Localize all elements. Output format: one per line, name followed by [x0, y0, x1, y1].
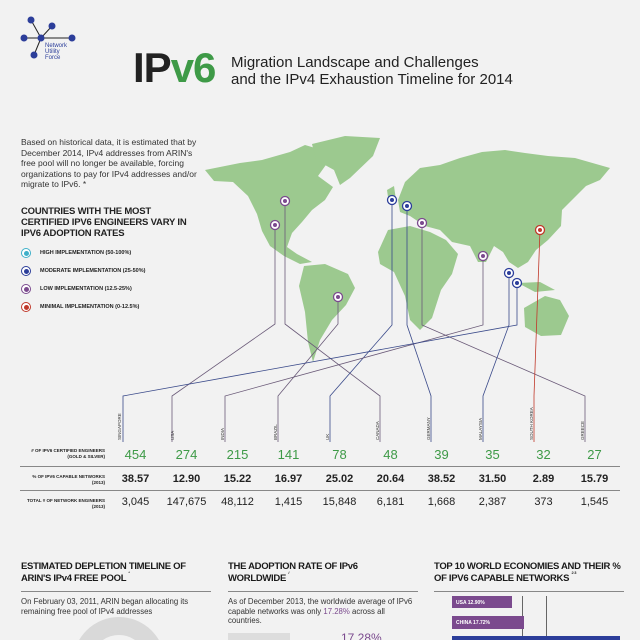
data table: 16.97 — [275, 473, 302, 485]
data table — [20, 447, 620, 509]
panel: top 10 economies: TOP 10 WORLD ECONOMIES AND THEIR % — [434, 561, 621, 572]
panel: adoption rate: WORLDWIDE / — [228, 570, 289, 584]
world map with pins: UK — [325, 434, 330, 440]
panel: top 10 economies — [434, 561, 624, 640]
data table: 454 — [125, 447, 146, 462]
legend: HIGH IMPLEMENTATION (50-100%) — [40, 250, 131, 256]
data table: 141 — [278, 447, 299, 462]
world map with pins: BRAZIL — [273, 424, 278, 440]
panel: adoption rate: THE ADOPTION RATE OF IPv6 — [228, 561, 358, 572]
data table: 20.64 — [377, 473, 404, 485]
data table: 274 — [176, 447, 197, 462]
data table: 3,045 — [122, 496, 149, 508]
subtitle: and the IPv4 Exhaustion Timeline for 2014 — [231, 71, 513, 88]
data table: 38.52 — [428, 473, 455, 485]
data table: 147,675 — [167, 496, 206, 508]
world map with pins: SOUTH KOREA — [529, 407, 534, 440]
world map with pins: SINGAPORE — [117, 413, 122, 440]
data table: % OF IPV6 CAPABLE NETWORKS (2013) — [32, 474, 105, 485]
panel: depletion timeline: ARIN'S IPv4 FREE POOL * — [21, 570, 130, 584]
data table: 25.02 — [326, 473, 353, 485]
data table: 2,387 — [479, 496, 506, 508]
panel: depletion timeline — [21, 561, 211, 640]
data table: 31.50 — [479, 473, 506, 485]
data table: 35 — [485, 447, 500, 462]
data table: 48,112 — [221, 496, 254, 508]
data table: 38.57 — [122, 473, 149, 485]
world map with pins — [117, 136, 610, 442]
data table: 27 — [587, 447, 602, 462]
panel: depletion timeline: On February 03, 2011, ARIN began allocating its remaining free pool of IPv4 addresses — [21, 597, 188, 616]
data table: 78 — [332, 447, 347, 462]
logo: Utility — [45, 49, 60, 55]
logo: Network — [45, 43, 68, 49]
data table: 32 — [536, 447, 551, 462]
data table: 15.79 — [581, 473, 608, 485]
panel: top 10 economies: CHINA 17.72% — [456, 620, 490, 626]
data table: 39 — [434, 447, 449, 462]
donut chart — [73, 617, 165, 640]
world map with pins: MALAYSIA — [478, 418, 483, 440]
world map with pins: USA — [170, 431, 175, 440]
heading: countries: COUNTRIES WITH THE MOST — [21, 206, 151, 217]
panel: depletion timeline: ESTIMATED DEPLETION TIMELINE OF — [21, 561, 186, 572]
heading: countries: IPV6 ADOPTION RATES — [21, 228, 124, 239]
world map with pins: INDIA — [220, 428, 225, 440]
data table: 2.89 — [533, 473, 554, 485]
world map with pins: GERMANY — [426, 417, 431, 440]
data table: 12.90 — [173, 473, 200, 485]
logo: Force — [45, 55, 61, 61]
legend: MINIMAL IMPLEMENTATION (0-12.5%) — [40, 304, 139, 310]
data table: 1,545 — [581, 496, 608, 508]
data table: 48 — [383, 447, 398, 462]
data table: TOTAL # OF NETWORK ENGINEERS (2013) — [27, 498, 105, 509]
title: IPv6 — [133, 44, 215, 91]
legend: MODERATE IMPLEMENTATION (25-50%) — [40, 268, 145, 274]
panel: adoption rate — [228, 561, 418, 640]
panel: adoption rate: As of December 2013, the worldwide average of IPv6 capable networks was only 17.28% across all countries. — [228, 597, 412, 625]
data table: 1,415 — [275, 496, 302, 508]
subtitle — [231, 54, 513, 88]
data table: 373 — [534, 496, 553, 508]
data table: 15.22 — [224, 473, 251, 485]
legend: LOW IMPLEMENTATION (12.5-25%) — [40, 286, 132, 292]
panel: top 10 economies: OF IPV6 CAPABLE NETWORKS 2 3 — [434, 570, 576, 584]
panel: top 10 economies: USA 12.90% — [456, 600, 485, 606]
heading: countries — [21, 206, 187, 239]
data table: 15,848 — [323, 496, 356, 508]
logo — [20, 16, 76, 61]
heading: countries: CERTIFIED IPV6 ENGINEERS VARY IN — [21, 217, 187, 228]
data table: 215 — [227, 447, 248, 462]
world map with pins: CANADA — [375, 421, 380, 440]
intro text: Based on historical data, it is estimated that by December 2014, IPv4 addresses from ARIN's free pool will no longer be available, forcing organizations to pay for IPv4 addresses and/or migrate to IPv6. * — [21, 137, 197, 189]
data table: 6,181 — [377, 496, 404, 508]
data table: 1,668 — [428, 496, 455, 508]
world map with pins: GREECE — [580, 421, 585, 440]
data table: # OF IPV6 CERTIFIED ENGINEERS (GOLD & SILVER) — [31, 448, 105, 459]
subtitle: Migration Landscape and Challenges — [231, 54, 479, 71]
legend — [21, 248, 146, 312]
